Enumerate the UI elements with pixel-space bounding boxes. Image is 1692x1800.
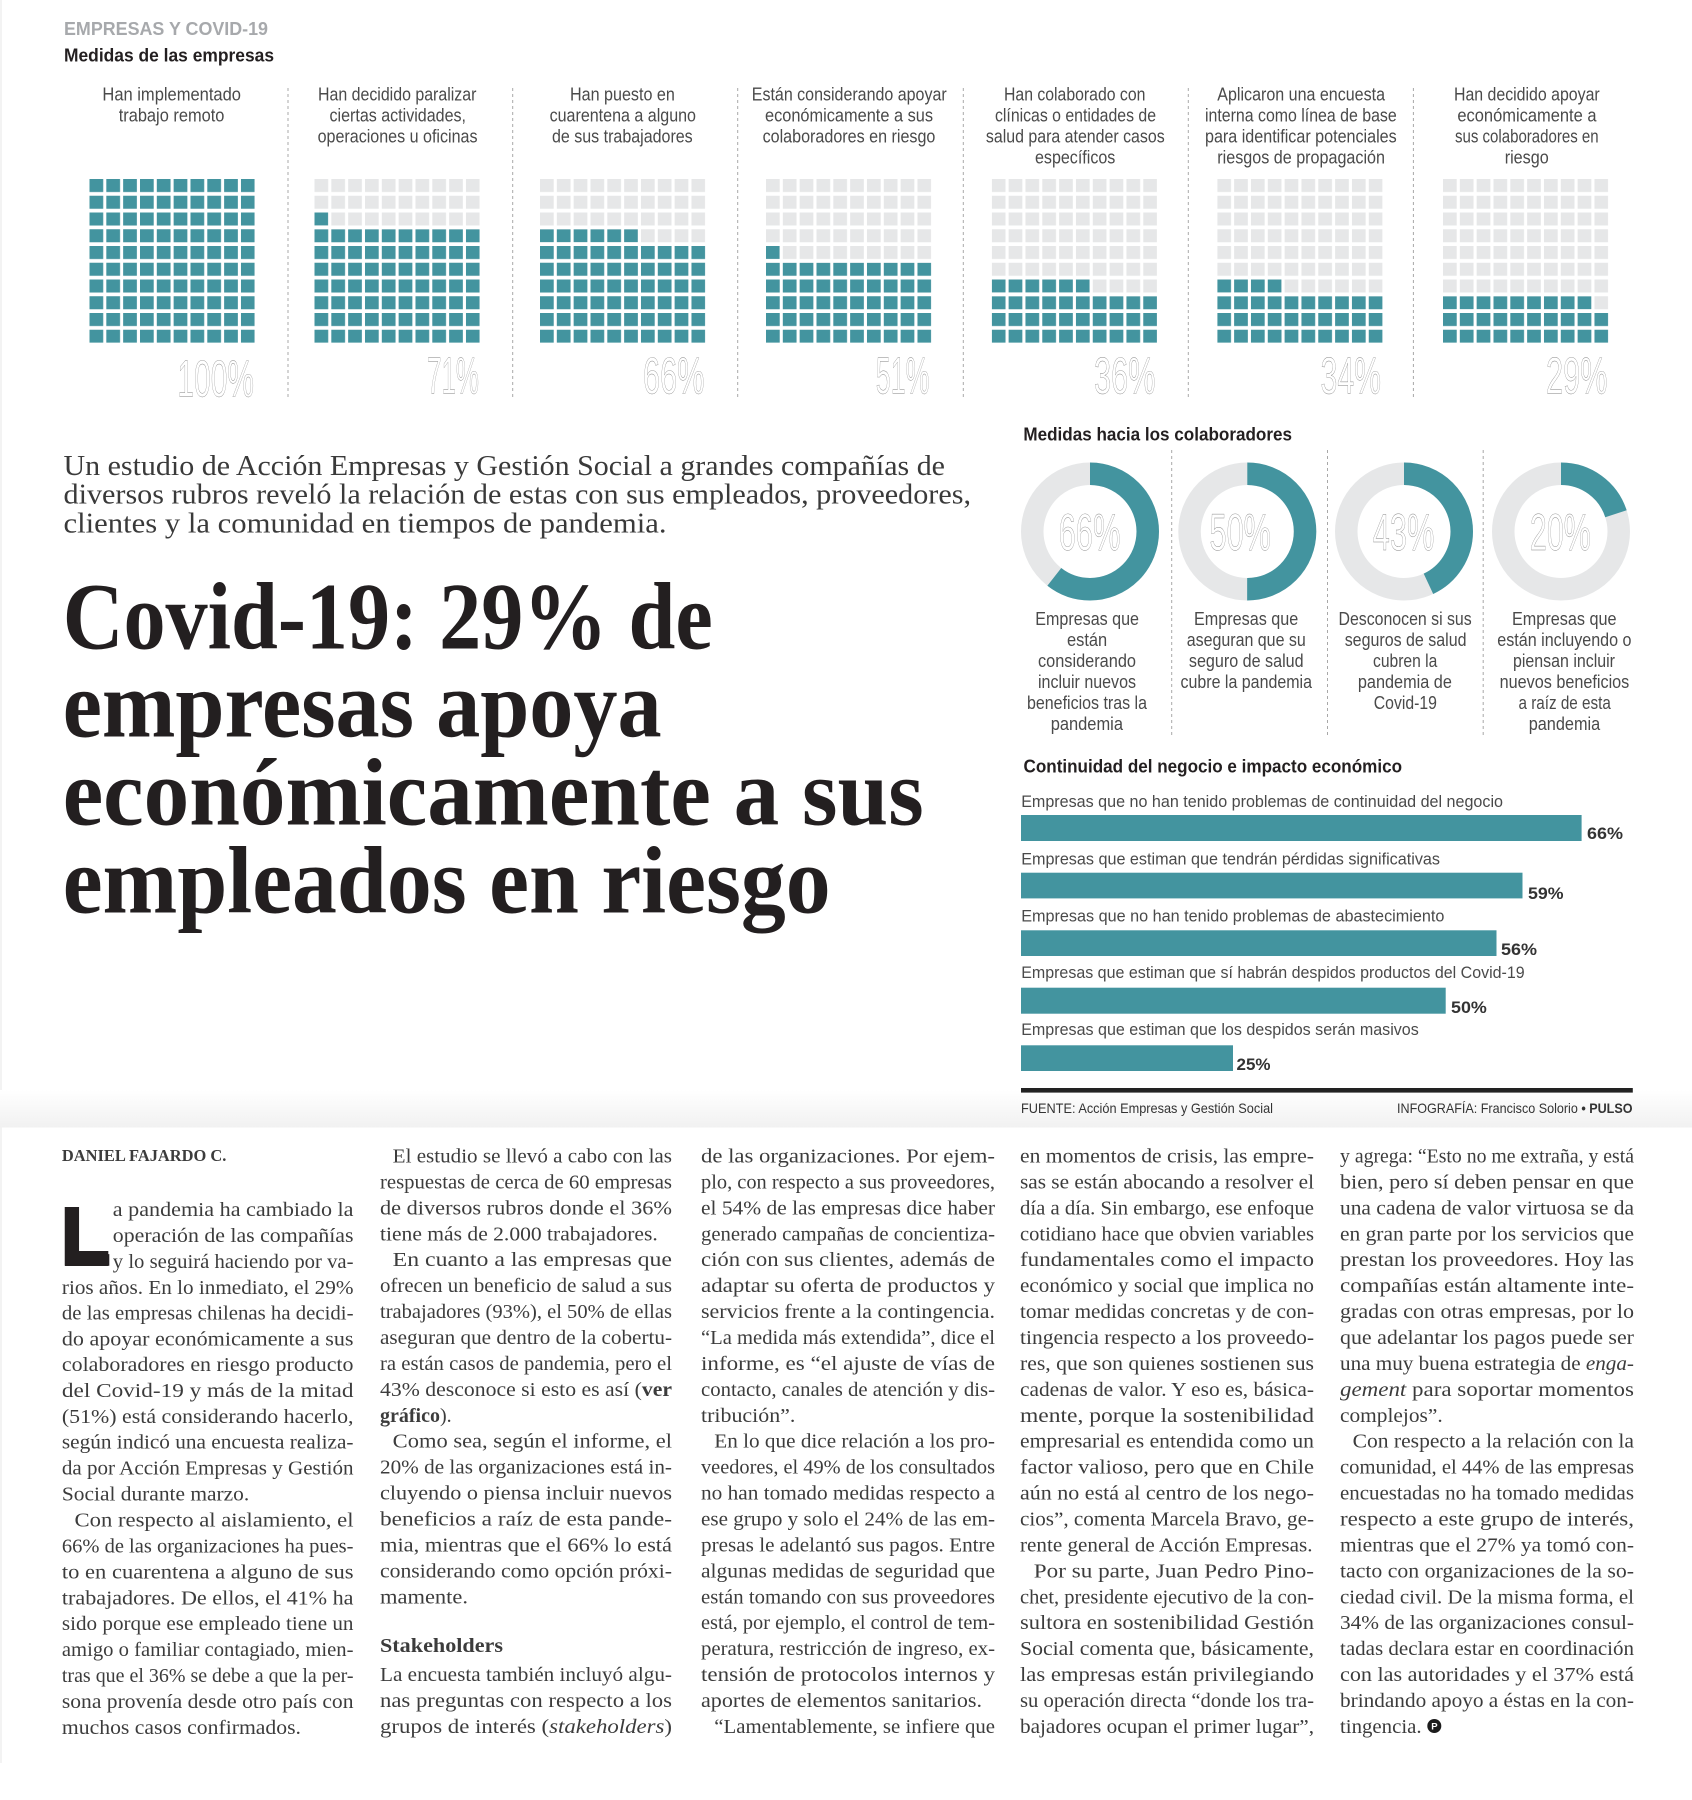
value 36%: 36%	[1094, 348, 1156, 406]
article column 2: gráfico).	[380, 1405, 452, 1427]
kicker: EMPRESAS Y COVID-19	[64, 18, 268, 39]
caption 20%: están incluyendo o	[1497, 630, 1632, 650]
label: económicamente a	[1457, 106, 1597, 126]
article column 4: aún no está al centro de los nego-	[1020, 1483, 1314, 1505]
article column 4: tingencia respecto a los proveedo-	[1020, 1327, 1314, 1349]
bar 59%: 59%	[1528, 884, 1564, 903]
article column 1: amigo o familiar contagiado, mien-	[62, 1639, 354, 1661]
label	[1454, 84, 1600, 168]
caption 66%	[1027, 609, 1148, 734]
article column 1: colaboradores en riesgo producto	[62, 1354, 354, 1376]
label: económicamente a sus	[765, 106, 933, 126]
heading: Medidas hacia los colaboradores	[1023, 424, 1292, 445]
article column 2: Como sea, según el informe, el	[393, 1431, 672, 1453]
caption 50%	[1180, 609, 1313, 692]
article column 3: está, por ejemplo, el control de tem-	[701, 1612, 995, 1634]
article column 4: res, que son quienes sostienen sus	[1020, 1353, 1314, 1375]
intro paragraph: clientes y la comunidad en tiempos de pandemia.	[64, 508, 666, 539]
caption 20%	[1497, 609, 1632, 734]
article column 5: ciedad civil. De la misma forma, el	[1340, 1586, 1634, 1608]
article column 2: 43% desconoce si esto es así ( ver	[380, 1379, 672, 1401]
article column 5: comunidad, el 44% de las empresas	[1340, 1457, 1634, 1479]
donut 20%: 20%	[1530, 504, 1591, 562]
label: interna como línea de base	[1205, 106, 1397, 126]
article column 3: adaptar su oferta de productos y	[701, 1275, 996, 1297]
article column 4: su operación directa “donde los tra-	[1020, 1690, 1314, 1712]
article column 4: en momentos de crisis, las empre-	[1020, 1146, 1314, 1168]
icon: Pulso end mark	[1427, 1719, 1441, 1733]
article column 2: nas preguntas con respecto a los	[380, 1690, 672, 1712]
article column 4: fundamentales como el impacto	[1020, 1249, 1314, 1271]
article column 3	[701, 1146, 996, 1738]
caption 66%: considerando	[1038, 651, 1136, 671]
caption 66%: están	[1067, 630, 1107, 650]
label: ciertas actividades,	[330, 106, 466, 126]
label: Han implementado	[102, 84, 241, 104]
article column 3: ese grupo y solo el 24% de las em-	[701, 1508, 995, 1530]
article column 1: 66% de las organizaciones ha pues-	[62, 1536, 354, 1558]
article column 4: cios”, comenta Marcela Bravo, ge-	[1020, 1508, 1314, 1530]
article column 3: están tomando con sus proveedores	[701, 1586, 995, 1608]
article column 1: Con respecto al aislamiento, el	[74, 1510, 354, 1532]
article column 2: La encuesta también incluyó algu-	[380, 1664, 672, 1686]
header: section kicker and heading	[64, 18, 274, 66]
byline: DANIEL FAJARDO C.	[62, 1146, 226, 1165]
article column 5	[1340, 1146, 1634, 1738]
article column 3: no han tomado medidas respecto a	[701, 1483, 995, 1505]
bar 50%: 50%	[1451, 998, 1487, 1017]
bar 56%: 56%	[1501, 940, 1537, 959]
article column 1	[60, 1146, 354, 1739]
article column 1: rios años. En lo inmediato, el 29%	[62, 1277, 354, 1299]
article column 2: de diversos rubros donde el 36%	[380, 1197, 672, 1219]
bar 25%: Empresas que estiman que los despidos serán masivos	[1021, 1020, 1419, 1039]
label	[550, 84, 696, 146]
waffle chart 36%	[992, 179, 1157, 343]
article column 1: de las empresas chilenas ha decidi-	[62, 1303, 354, 1325]
label: colaboradores en riesgo	[763, 126, 935, 146]
article column 3: contacto, canales de atención y dis-	[701, 1379, 995, 1401]
caption 20%: piensan incluir	[1513, 651, 1615, 671]
article column 3: “La medida más extendida”, dice el	[701, 1327, 995, 1349]
article column 2: aseguran que dentro de la cobertu-	[380, 1327, 672, 1349]
article column 5: y agrega: “Esto no me extraña, y está	[1340, 1146, 1634, 1168]
article column 1: (51%) está considerando hacerlo,	[62, 1406, 354, 1428]
article column 4: las empresas están privilegiando	[1020, 1664, 1314, 1686]
waffle chart 71%	[314, 179, 480, 343]
article column 5: brindando apoyo a éstas en la con-	[1340, 1690, 1634, 1712]
article column 4: día a día. Sin embargo, ese enfoque	[1020, 1197, 1314, 1219]
article column 2: mia, mientras que el 66% lo está	[380, 1534, 672, 1556]
label: para identificar potenciales	[1205, 126, 1397, 146]
article column 2: 20% de las organizaciones está in-	[380, 1457, 672, 1479]
article column 5: mientras que el 27% ya tomó con-	[1340, 1534, 1634, 1556]
icon: Pulso end mark: P	[1431, 1722, 1438, 1732]
article column 5: tacto con organizaciones de la so-	[1340, 1560, 1634, 1582]
article column 5: Con respecto a la relación con la	[1353, 1431, 1634, 1453]
article column 3: generado campañas de concientiza-	[701, 1223, 995, 1245]
value 29%: 29%	[1546, 348, 1608, 406]
bar 50%	[1021, 963, 1525, 1017]
waffle chart 100%	[90, 179, 255, 343]
article column 1: do apoyar económicamente a sus	[62, 1328, 354, 1350]
label: Han puesto en	[570, 84, 675, 104]
waffle chart 66%	[540, 179, 705, 343]
donut 43%	[1346, 474, 1462, 589]
article column 2: beneficios a raíz de esta pande-	[380, 1508, 672, 1530]
article column 3: peratura, restricción de ingreso, ex-	[701, 1638, 995, 1660]
label: riesgos de propagación	[1217, 148, 1385, 168]
article column 4: Por su parte, Juan Pedro Pino-	[1034, 1560, 1314, 1582]
article column 5: 34% de las organizaciones consul-	[1340, 1612, 1634, 1634]
article column 2: tiene más de 2.000 trabajadores.	[380, 1223, 658, 1245]
label: clínicas o entidades de	[995, 106, 1156, 126]
caption 43%: Desconocen si sus	[1338, 609, 1472, 629]
bar 50%: Empresas que estiman que sí habrán despidos productos del Covid-19	[1021, 963, 1525, 982]
title: Covid-19: 29% de	[63, 563, 713, 669]
article column 5: bien, pero sí deben pensar en que	[1340, 1171, 1634, 1193]
label: sus colaboradores en	[1455, 126, 1599, 146]
waffle chart 29%	[1443, 179, 1608, 343]
article column 4: empresarial es entendida como un	[1020, 1431, 1314, 1453]
article column 4: Social comenta que, básicamente,	[1020, 1638, 1314, 1660]
caption 66%: beneficios tras la	[1027, 693, 1148, 713]
article column 5: complejos”.	[1340, 1405, 1443, 1427]
article column 5: una cadena de valor virtuosa se da	[1340, 1197, 1634, 1219]
intro paragraph	[64, 451, 971, 539]
article column 4: mente, porque la sostenibilidad	[1020, 1405, 1314, 1427]
panel: encuesta interna 34%	[1205, 84, 1397, 406]
waffle chart 51%	[766, 179, 931, 343]
article column 5: encuestadas no ha tomado medidas	[1340, 1483, 1634, 1505]
label: de sus trabajadores	[552, 126, 693, 146]
article column 2: grupos de interés ( stakeholders )	[380, 1716, 672, 1738]
title: empresas apoya	[63, 652, 662, 758]
article column 3: aportes de elementos sanitarios.	[701, 1690, 982, 1712]
article column 3: veedores, el 49% de los consultados	[701, 1457, 995, 1479]
panel: paralizar actividades 71%	[314, 84, 480, 406]
label: Han colaborado con	[1004, 84, 1145, 104]
label	[986, 84, 1165, 168]
article column 3: plo, con respecto a sus proveedores,	[701, 1171, 995, 1193]
article column 1: to en cuarentena a alguno de sus	[62, 1561, 354, 1583]
article column 4: sultora en sostenibilidad Gestión	[1020, 1612, 1314, 1634]
bar 25%: 25%	[1236, 1055, 1270, 1074]
article column 2: El estudio se llevó a cabo con las	[393, 1146, 672, 1168]
donut 66%: 66%	[1059, 504, 1120, 562]
caption 20%: nuevos beneficios	[1500, 672, 1629, 692]
caption 20%: a raíz de esta	[1518, 693, 1612, 713]
donut 50%	[1190, 474, 1305, 589]
article column 4: cotidiano hace que obvien variables	[1020, 1223, 1314, 1245]
article column 1: trabajadores. De ellos, el 41% ha	[62, 1587, 354, 1609]
article column 4: factor valioso, pero que en Chile	[1020, 1457, 1314, 1479]
value 34%: 34%	[1320, 348, 1381, 406]
article column 3: informe, es “el ajuste de vías de	[701, 1353, 995, 1375]
article column 3: el 54% de las empresas dice haber	[701, 1197, 995, 1219]
article column 5: compañías están altamente inte-	[1340, 1275, 1634, 1297]
article column 2: ra están casos de pandemia, pero el	[380, 1353, 672, 1375]
article column 2: cluyendo o piensa incluir nuevos	[380, 1483, 672, 1505]
caption 43%: pandemia de	[1358, 672, 1452, 692]
caption 66%: incluir nuevos	[1038, 672, 1136, 692]
article column 5: que adelantar los pagos puede ser	[1340, 1327, 1634, 1349]
panel: Continuidad del negocio e impacto económico	[1021, 756, 1623, 1074]
caption 50%: seguro de salud	[1189, 651, 1304, 671]
donut 66%	[1032, 474, 1148, 589]
article column 3: tensión de protocolos internos y	[701, 1664, 996, 1686]
title: empleados en riesgo	[63, 827, 831, 933]
heading: Continuidad del negocio e impacto económico	[1024, 756, 1402, 777]
article column 3: algunas medidas de seguridad que	[701, 1560, 995, 1582]
panel: trabajo remoto 100%	[90, 84, 255, 408]
article column 5: con las autoridades y el 37% está	[1340, 1664, 1634, 1686]
caption 43%: seguros de salud	[1345, 630, 1466, 650]
bar 66%: Empresas que no han tenido problemas de continuidad del negocio	[1021, 792, 1503, 811]
value 66%: 66%	[643, 348, 704, 406]
panel: apoyo económico 29%	[1443, 84, 1608, 406]
label: salud para atender casos	[986, 126, 1165, 146]
waffle chart 34%	[1217, 179, 1382, 343]
bar 59%	[1021, 850, 1564, 903]
article column 5: tadas declara estar en coordinación	[1340, 1638, 1634, 1660]
article column 3: ción con sus clientes, además de	[701, 1249, 995, 1271]
article column 4: sas se están abocando a resolver el	[1020, 1171, 1314, 1193]
article column 3: tribución”.	[701, 1405, 795, 1427]
label: trabajo remoto	[119, 106, 224, 126]
article column 4: chet, presidente ejecutivo de la con-	[1020, 1586, 1314, 1608]
label	[102, 84, 241, 126]
value 100%: 100%	[177, 350, 254, 408]
article column 2: trabajadores (93%), el 50% de ellas	[380, 1301, 672, 1323]
source credit: FUENTE: Acción Empresas y Gestión Social	[1021, 1100, 1273, 1116]
panel: Medidas hacia los colaboradores	[1023, 424, 1632, 737]
bar 56%	[1021, 906, 1537, 959]
value 51%: 51%	[876, 348, 930, 406]
article column 1: da por Acción Empresas y Gestión	[62, 1458, 354, 1480]
donut 20%	[1503, 474, 1619, 589]
caption 50%: aseguran que su	[1187, 630, 1306, 650]
article column 5: una muy buena estrategia de enga-	[1340, 1353, 1634, 1375]
article column 4	[1020, 1146, 1314, 1738]
label: cuarentena a alguno	[550, 106, 696, 126]
article column 5: respecto a este grupo de interés,	[1340, 1508, 1634, 1530]
article column 4: cadenas de valor. Y eso es, básica-	[1020, 1379, 1314, 1401]
label	[752, 84, 947, 146]
article column 1: Social durante marzo.	[62, 1484, 249, 1506]
bar 66%: 66%	[1587, 824, 1623, 843]
subheading: Stakeholders: Stakeholders	[380, 1635, 503, 1657]
article column 4: rente general de Acción Empresas.	[1020, 1534, 1312, 1556]
article column 5: en gran parte por los servicios que	[1340, 1223, 1634, 1245]
panel: cuarentena 66%	[540, 84, 705, 406]
caption 50%: cubre la pandemia	[1180, 672, 1313, 692]
label: operaciones u oficinas	[318, 126, 478, 146]
article column 3: “Lamentablemente, se infiere que	[714, 1716, 995, 1738]
caption 43%	[1338, 609, 1472, 713]
bar 59%: Empresas que estiman que tendrán pérdidas significativas	[1021, 850, 1440, 868]
label	[318, 84, 478, 146]
caption 66%: pandemia	[1051, 714, 1124, 734]
article column 1: a pandemia ha cambiado la	[113, 1199, 354, 1221]
article column 2: ofrecen un beneficio de salud a sus	[380, 1275, 672, 1297]
label: Están considerando apoyar	[752, 84, 947, 104]
article column 5: gement para soportar momentos	[1340, 1379, 1634, 1401]
panel: considerando apoyar 51%	[752, 84, 947, 406]
article column 3: presas le adelantó sus pagos. Entre	[701, 1534, 995, 1556]
article column 1: y lo seguirá haciendo por va-	[113, 1251, 354, 1273]
article column 5: gradas con otras empresas, por lo	[1340, 1301, 1634, 1323]
article column 2: mamente.	[380, 1586, 468, 1608]
article column 5: tingencia.	[1340, 1716, 1422, 1738]
heading: Medidas de las empresas: Medidas de las empresas	[64, 44, 274, 66]
article column 1: muchos casos confirmados.	[62, 1717, 301, 1739]
label: riesgo	[1505, 148, 1549, 168]
donut 43%: 43%	[1373, 504, 1434, 562]
caption 66%: Empresas que	[1035, 609, 1139, 629]
label: específicos	[1035, 148, 1115, 168]
article column 5: prestan los proveedores. Hoy las	[1340, 1249, 1634, 1271]
article column 3: de las organizaciones. Por ejem-	[701, 1146, 995, 1168]
article column 1: operación de las compañías	[113, 1225, 354, 1247]
article column 2: En cuanto a las empresas que	[393, 1249, 672, 1271]
donut 50%: 50%	[1210, 504, 1271, 562]
article column 2: considerando como opción próxi-	[380, 1560, 672, 1582]
intro paragraph: diversos rubros reveló la relación de estas con sus empleados, proveedores,	[64, 480, 971, 511]
title	[63, 563, 924, 933]
caption 43%: Covid-19	[1374, 693, 1437, 713]
caption 43%: cubren la	[1373, 651, 1438, 671]
article column 4: económico y social que implica no	[1020, 1275, 1314, 1297]
article column 2	[380, 1146, 672, 1738]
caption 50%: Empresas que	[1194, 609, 1298, 629]
article column 1: según indicó una encuesta realiza-	[62, 1432, 354, 1454]
label: Han decidido apoyar	[1454, 84, 1600, 104]
article column 3: servicios frente a la contingencia.	[701, 1301, 995, 1323]
drop cap L: L	[60, 1192, 111, 1283]
article column 1: sona provenía desde otro país con	[62, 1691, 354, 1713]
infographic credit: INFOGRAFÍA: Francisco Solorio • PULSO	[1397, 1100, 1633, 1116]
label: Han decidido paralizar	[318, 84, 476, 104]
label	[1205, 84, 1397, 168]
caption 20%: Empresas que	[1512, 609, 1616, 629]
intro paragraph: Un estudio de Acción Empresas y Gestión Social a grandes compañías de	[64, 451, 945, 482]
title: económicamente a sus	[63, 739, 924, 845]
bar 66%	[1021, 792, 1623, 843]
article column 4: bajadores ocupan el primer lugar”,	[1020, 1716, 1314, 1738]
bar 25%	[1021, 1020, 1419, 1074]
caption 20%: pandemia	[1529, 714, 1601, 734]
article column 4: tomar medidas concretas y de con-	[1020, 1301, 1314, 1323]
article column 3: En lo que dice relación a los pro-	[714, 1431, 995, 1453]
bar 56%: Empresas que no han tenido problemas de abastecimiento	[1021, 906, 1444, 926]
panel: paralizar actividades 71%: 71%	[427, 348, 479, 406]
article column 1: del Covid-19 y más de la mitad	[62, 1380, 354, 1402]
article column 2: respuestas de cerca de 60 empresas	[380, 1171, 672, 1193]
article column 1: sido porque ese empleado tiene un	[62, 1613, 354, 1635]
panel: clínicas 36%	[986, 84, 1165, 406]
article column 1: tras que el 36% se debe a que la per-	[62, 1665, 354, 1687]
label: Aplicaron una encuesta	[1217, 84, 1386, 104]
